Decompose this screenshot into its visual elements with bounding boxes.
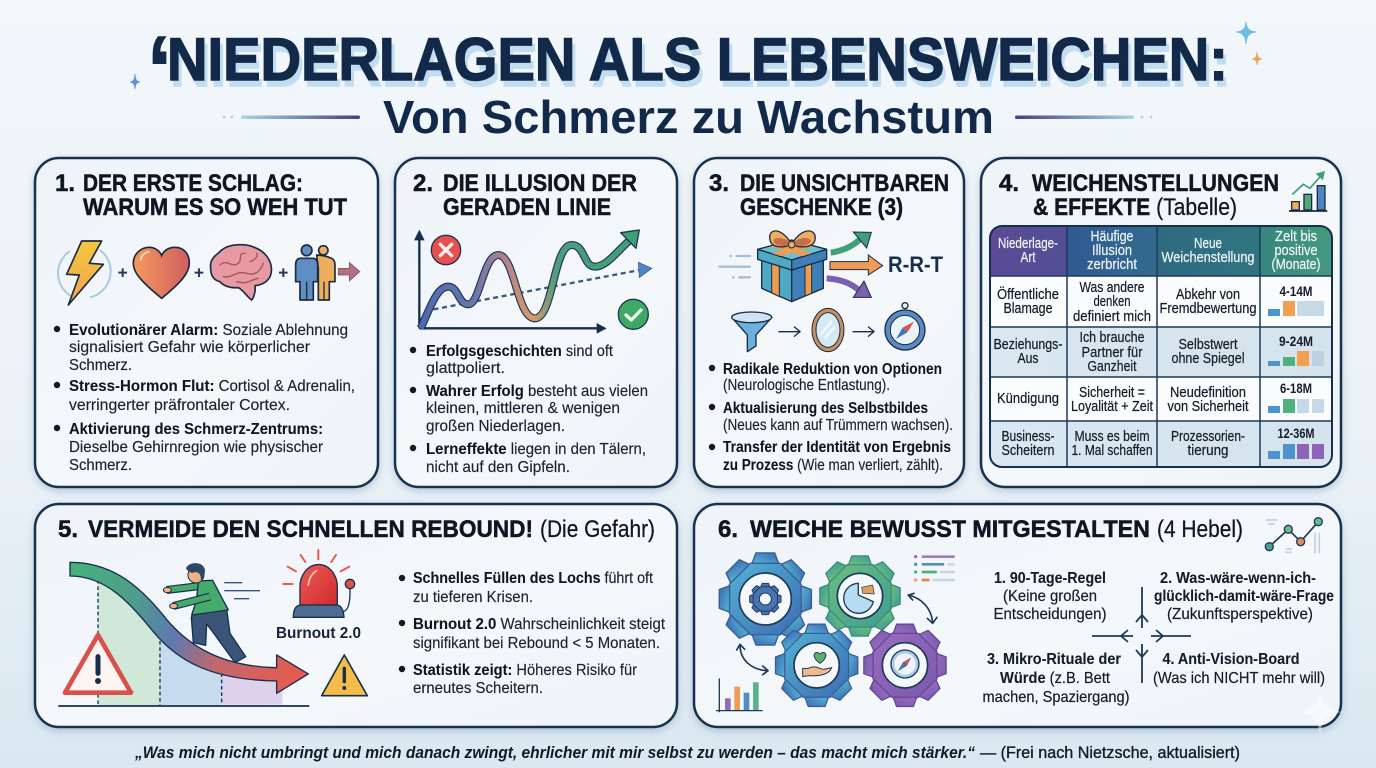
table row: Beziehungs-Aus: ohne Spiegel [1172,351,1244,367]
table [990,226,1332,467]
heading 2: 2. [413,170,433,197]
arrow: four-way cross [1092,587,1191,683]
table row: Business-Scheitern: 1. Mal schaffen [1072,443,1152,459]
heading 4: WEICHENSTELLUNGEN [1032,170,1279,197]
lever 2: 2. Was-wäre-wenn-ich- [1160,570,1316,587]
panel 5: vermeide den schnellen rebound [35,504,677,727]
bullet list 5: signifikant bei Rebound < 5 Monaten. [413,635,660,652]
gear: compass [864,624,946,706]
table header: positive [1274,243,1318,259]
bullet list 5 [399,570,666,697]
bullet list 2: Erfolgsgeschichten sind oft [426,343,614,360]
bullet list 5: erneutes Scheitern. [413,680,543,697]
arrow: circular links [737,593,937,675]
lever 1: (Keine großen [1003,588,1097,605]
table row: Business-Scheitern: 12-36M [1278,425,1314,441]
bullet list 2: glattpoliert. [426,360,505,377]
table row: Kündigung: Sicherheit = [1079,385,1145,401]
table row: Beziehungs-Aus: 9-24M [1279,333,1313,349]
heading 3: DIE UNSICHTBAREN [740,170,949,197]
bullet list 3: zu Prozess (Wie man verliert, zählt). [723,457,943,474]
table header: Art [1020,250,1036,266]
icon: sparkles [130,22,1262,89]
icon: rising bar chart [1289,171,1327,211]
lever 2: (Zukunftsperspektive) [1167,606,1313,623]
panel 3: die unsichtbaren geschenke [694,158,964,487]
lever 3: Würde (z.B. Bett [1000,670,1111,687]
footer quote: — (Frei nach Nietzsche, aktualisiert) [980,743,1240,762]
heading 3: 3. [709,170,729,197]
bullet list 2: Lerneffekte liegen in den Tälern, [426,441,646,458]
gear: caring hand [775,624,858,706]
heading 6: (4 Hebel) [1157,516,1243,543]
icon: network trend [1265,518,1322,553]
bullet list 3: Radikale Reduktion von Optionen [723,361,942,378]
bullet list 3: (Neues kann auf Trümmern wachsen). [723,417,953,434]
bullet list 1: Stress-Hormon Flut: Cortisol & Adrenalin, [69,378,355,395]
heading 3 [709,170,949,221]
bullet list 3: (Neurologische Entlastung). [723,377,890,394]
table row: Kündigung: Loyalität + Zeit [1071,399,1153,415]
lever 3: 3. Mikro-Rituale der [987,651,1121,668]
heading 5: VERMEIDE DEN SCHNELLEN REBOUND! [88,516,533,543]
heading 1 [55,170,347,221]
footer quote: „Was mich nicht umbringt und mich danach zwingt, ehrlicher mit mir selbst zu werden – das macht mich stärker.“ [134,743,975,762]
table header: Zelt bis [1275,229,1317,245]
icon: mini bar chart [716,678,763,712]
bullet list 2: nicht auf den Gipfeln. [426,459,570,476]
bullet list 5: Burnout 2.0 Wahrscheinlichkeit steigt [413,616,666,633]
lever 4: 4. Anti-Vision-Board [1162,651,1300,668]
bullet list 2: großen Niederlagen. [426,418,565,435]
bullet list 2 [410,343,648,476]
icon row: bolt, heart, brain, people [58,241,360,305]
table row: Öffentliche Blamage: Fremdbewertung [1160,301,1256,317]
label: R-R-T: R-R-T [888,252,944,277]
table header: Neue [1194,236,1222,252]
bullet list 1: Evolutionärer Alarm: Soziale Ablehnung [69,322,348,339]
heading 1: DER ERSTE SCHLAG: [83,170,303,197]
bullet list 5: Statistik zeigt: Höheres Risiko für [413,662,638,679]
table row: Business-Scheitern: tierung [1188,443,1228,459]
table header: zerbricht [1087,257,1137,273]
table row: Kündigung: Neudefinition [1170,385,1246,401]
heading 6: WEICHE BEWUSST MITGESTALTEN [750,516,1150,543]
table row: Beziehungs-Aus: Partner für [1082,345,1143,361]
icon: right warning triangle [322,655,367,696]
heading 5: (Die Gefahr) [540,516,655,543]
bullet list 1: Schmerz. [69,357,132,374]
heading 4: & EFFEKTE (Tabelle) [1033,194,1237,221]
table row: Beziehungs-Aus [994,330,1324,375]
table header: Niederlage- [998,236,1058,252]
table row: Beziehungs-Aus: Ich brauche [1080,330,1144,346]
table row: Business-Scheitern: Prozessorien- [1171,429,1245,445]
heading 4 [999,170,1279,221]
icon: four gears [716,553,955,712]
table row: Öffentliche Blamage: Was andere [1080,280,1144,296]
line chart [414,230,652,334]
gear: settings [719,553,811,645]
table row: Öffentliche Blamage: Abkehr von [1176,287,1240,303]
chart: downhill rebound curve [58,550,367,706]
table row: Öffentliche Blamage: 4-14M [1280,283,1312,299]
icon: funnel and mirror sequence [732,308,874,352]
heading 3: GESCHENKE (3) [740,194,903,221]
table row: Öffentliche Blamage [997,280,1324,325]
icon: left warning triangle [65,635,131,693]
bullet list 3: Aktualisierung des Selbstbildes [723,400,928,417]
bullet list 1: Schmerz. [69,457,132,474]
lever 3: machen, Spaziergang) [982,689,1130,706]
subtitle [223,91,1152,143]
table row: Beziehungs-Aus: Selbstwert [1178,337,1238,353]
table header: Illusion [1092,243,1132,259]
table row: Business-Scheitern: Scheitern [1002,443,1054,459]
lever 3 [982,651,1130,706]
table header: Weichenstellung [1162,250,1254,266]
icon: compass [885,303,925,350]
icon: gift with three arrows [719,231,883,302]
table row: Beziehungs-Aus: Aus [1018,351,1038,367]
table row: Kündigung: von Sicherheit [1168,399,1248,415]
lever 1 [994,570,1106,623]
panel 1: der erste schlag [35,158,378,487]
lever 1: 1. 90-Tage-Regel [994,570,1106,587]
table row: Öffentliche Blamage: Blamage [1004,301,1052,317]
bullet list 1: Dieselbe Gehirnregion wie physischer [69,439,324,456]
lever 1: Entscheidungen) [994,606,1106,623]
lever 4 [1153,651,1325,687]
table row: Kündigung: 6-18M [1280,380,1312,396]
icon: corner sparkle [1296,688,1344,736]
table row: Öffentliche Blamage: definiert mich [1073,309,1151,325]
heading 5: 5. [58,516,78,543]
bullet list 1: signalisiert Gefahr wie körperlicher [69,339,311,356]
bullet list 1 [54,322,355,474]
table row: Business-Scheitern: Muss es beim [1074,429,1150,445]
heading 4: 4. [999,170,1019,197]
heading 2: GERADEN LINIE [443,194,611,221]
table row: Kündigung: Kündigung [997,391,1059,407]
table row: Beziehungs-Aus: Ganzheit [1088,359,1136,375]
table row: Business-Scheitern: Business- [1002,429,1055,445]
lever 4: (Was ich NICHT mehr will) [1153,670,1325,687]
bullet list 3: Transfer der Identität von Ergebnis [723,439,951,456]
table row: Business-Scheitern [1002,425,1324,459]
table row: Beziehungs-Aus: Beziehungs- [994,337,1063,353]
bullet list 2: kleinen, mittleren & wenigen [426,400,620,417]
panel 6: weiche bewusst mitgestalten [694,504,1341,727]
lever 2 [1154,570,1334,623]
icon: running person [163,563,260,663]
table row: Öffentliche Blamage: denken [1094,294,1130,310]
table row: Öffentliche Blamage: Öffentliche [997,285,1059,303]
bullet list 2: Wahrer Erfolg besteht aus vielen [426,383,648,400]
table header: (Monate) [1272,257,1320,273]
table header: Häufige [1090,229,1134,245]
heading 6: 6. [718,516,738,543]
table row: Kündigung [997,380,1324,415]
bullet list 3 [709,361,953,474]
bullet list 5: zu tieferen Krisen. [413,589,533,606]
bullet list 1: Aktivierung des Schmerz-Zentrums: [69,421,323,438]
label: Burnout 2.0: Burnout 2.0 [276,625,361,642]
icon: red cross [431,235,461,265]
icon: burnout siren [283,550,355,617]
title: NIEDERLAGEN ALS LEBENSWEICHEN: [167,26,1228,93]
title: NIEDERLAGEN ALS LEBENSWEICHEN: [170,32,1231,99]
heading 2 [413,170,637,221]
heading 1: WARUM ES SO WEH TUT [83,194,347,221]
subtitle: Von Schmerz zu Wachstum [383,91,994,143]
bullet list 5: Schnelles Füllen des Lochs führt oft [413,570,653,587]
lever 2: glücklich-damit-wäre-Frage [1154,588,1334,605]
panel 2: die illusion der geraden linie [395,158,677,487]
table header [998,229,1320,273]
title: ‘ [146,15,173,125]
title [146,15,1231,125]
heading 2: DIE ILLUSION DER [443,170,637,197]
bullet list 1: verringerter präfrontaler Cortex. [69,397,290,414]
panel 4: weichenstellungen und effekte [981,158,1341,487]
heading 1: 1. [55,170,75,197]
icon: green check [618,299,648,329]
icon: mini legend [914,555,955,582]
gear: pie chart [820,556,900,636]
